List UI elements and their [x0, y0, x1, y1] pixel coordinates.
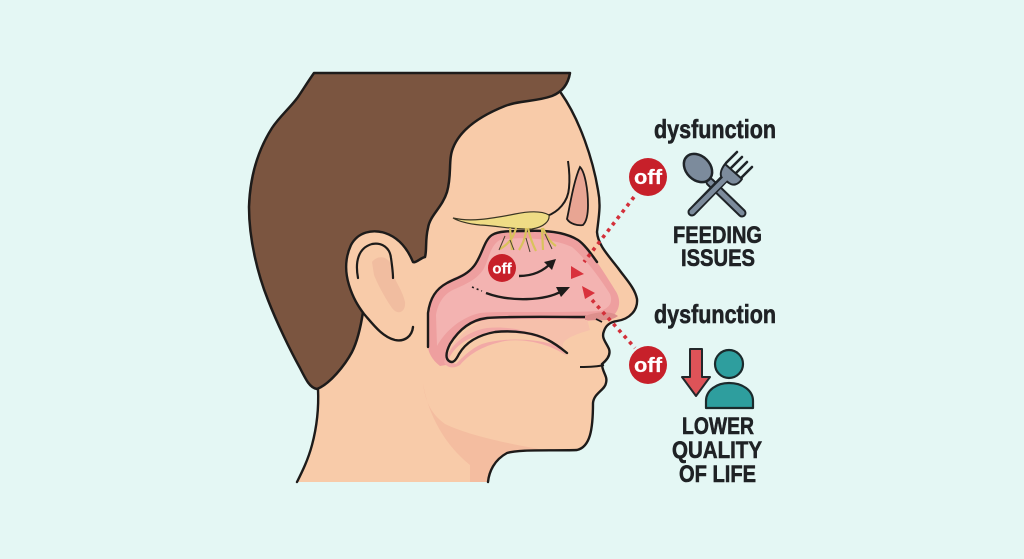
jaw shadow: [423, 383, 545, 482]
off badge: nasal cavity: off: [492, 260, 513, 278]
palate band: [448, 319, 590, 364]
olfactory nerve: [453, 161, 569, 252]
heading: dysfunction bottom: dysfunction: [654, 299, 776, 329]
label: lower quality of life: LOWER: [682, 413, 754, 440]
dotted signal line: feeding: [571, 197, 634, 279]
ear: [346, 231, 425, 340]
label: feeding issues: FEEDING: [673, 222, 762, 249]
lip line: [580, 365, 604, 367]
label: lower quality of life: OF LIFE: [679, 461, 756, 488]
label: feeding issues: ISSUES: [681, 245, 755, 272]
nostril: [596, 319, 602, 322]
label: lower quality of life: QUALITY: [672, 437, 762, 464]
neck outline: [297, 389, 318, 482]
off badge: quality of life: [629, 346, 667, 384]
off badge: quality of life: off: [634, 355, 662, 377]
dotted signal line: quality of life: [582, 286, 635, 348]
head illustration: [249, 73, 637, 482]
off badge: feeding: [629, 158, 667, 196]
off badge: nasal cavity: [488, 254, 516, 282]
airflow arrows: [472, 259, 570, 299]
frontal sinus: [567, 167, 588, 225]
icon: spoon and fork: [678, 148, 752, 213]
nasal cavity: [428, 231, 619, 367]
label: feeding issues: [673, 222, 762, 272]
icon: down arrow and person: [682, 349, 753, 408]
face and neck: [297, 90, 637, 482]
label: lower quality of life: [672, 413, 762, 488]
off badge: feeding: off: [634, 167, 662, 189]
heading: dysfunction top: dysfunction: [654, 114, 776, 144]
hair: [249, 73, 570, 389]
face outline: [488, 93, 637, 482]
